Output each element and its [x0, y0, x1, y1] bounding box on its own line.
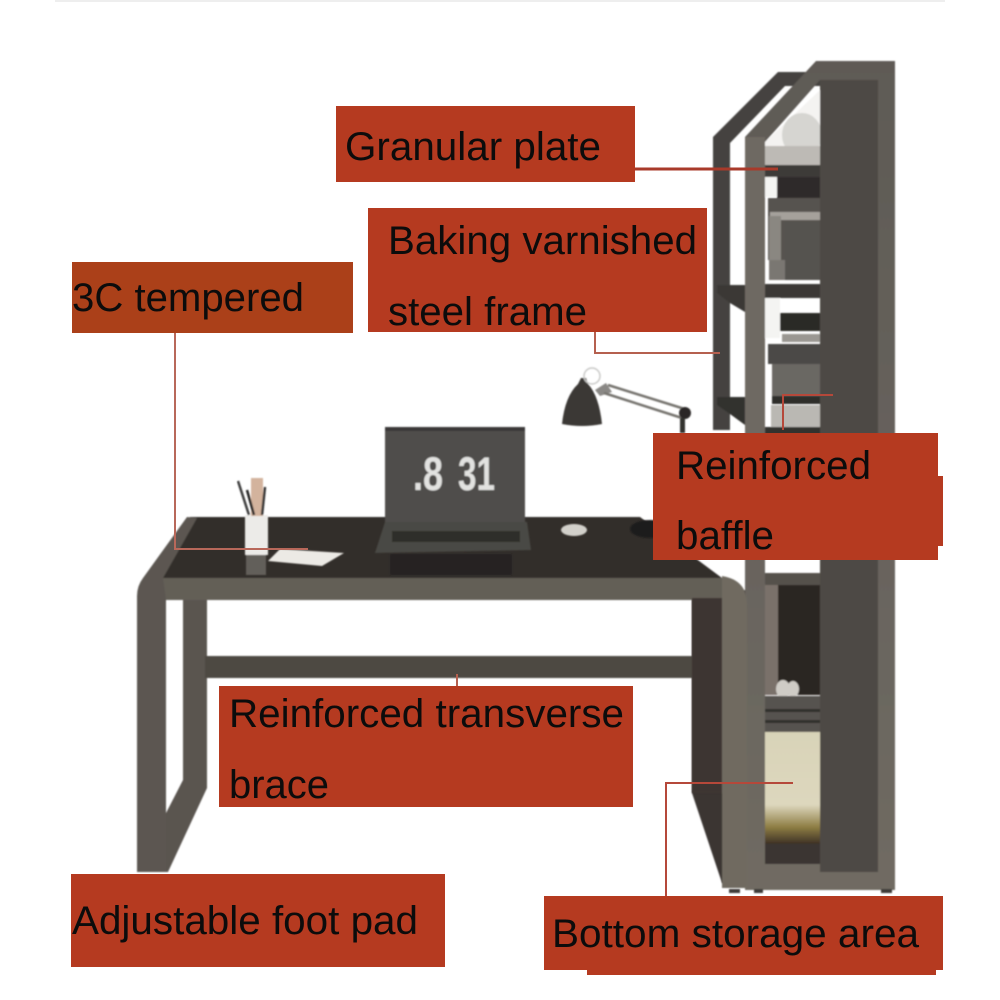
label: Adjustable foot pad — [71, 874, 445, 967]
bookcase — [692, 61, 895, 893]
cable grommet — [561, 524, 587, 536]
pen holder — [238, 478, 268, 575]
right leg — [722, 576, 747, 888]
label: Bottom storage area: Bottom storage area — [552, 912, 920, 956]
left leg frame — [137, 517, 197, 872]
label: 3C tempered: 3C tempered — [72, 276, 304, 320]
paper note — [268, 549, 344, 566]
laptop — [375, 427, 531, 575]
label: Bottom storage area — [544, 896, 943, 975]
rear legs — [692, 590, 745, 885]
label: Reinforced baffle: baffle — [676, 514, 774, 558]
reflection — [390, 554, 512, 575]
label: Granular plate — [336, 106, 635, 182]
clock reading: .8 — [413, 447, 443, 500]
front frame — [745, 61, 895, 890]
lamp — [562, 368, 691, 538]
label: Baking varnished steel frame: steel frame — [388, 290, 587, 334]
label: Granular plate: Granular plate — [345, 125, 601, 169]
label: 3C tempered — [72, 262, 353, 333]
dark side panel — [820, 80, 878, 872]
leader lines — [175, 169, 833, 896]
shelf contents — [765, 90, 822, 864]
label: Reinforced transverse brace: brace — [229, 763, 329, 807]
back frame — [713, 72, 830, 430]
keyboard base — [375, 522, 531, 553]
rear left leg — [165, 598, 207, 872]
label: Reinforced baffle — [653, 433, 943, 560]
label: Reinforced transverse brace — [219, 686, 633, 807]
label: Adjustable foot pad: Adjustable foot pad — [72, 899, 418, 943]
label: Baking varnished steel frame — [368, 208, 707, 334]
clock reading: 31 — [458, 447, 495, 500]
front rail — [160, 578, 723, 600]
label: Reinforced transverse brace: Reinforced transverse — [229, 692, 624, 736]
clock reading — [413, 447, 495, 500]
desk top — [155, 517, 722, 582]
screen — [385, 427, 525, 523]
frame feet — [729, 889, 892, 893]
label: Reinforced baffle: Reinforced — [676, 444, 871, 488]
transverse brace — [205, 656, 695, 678]
desk — [137, 517, 747, 888]
label: Baking varnished steel frame: Baking varnished — [388, 219, 697, 263]
